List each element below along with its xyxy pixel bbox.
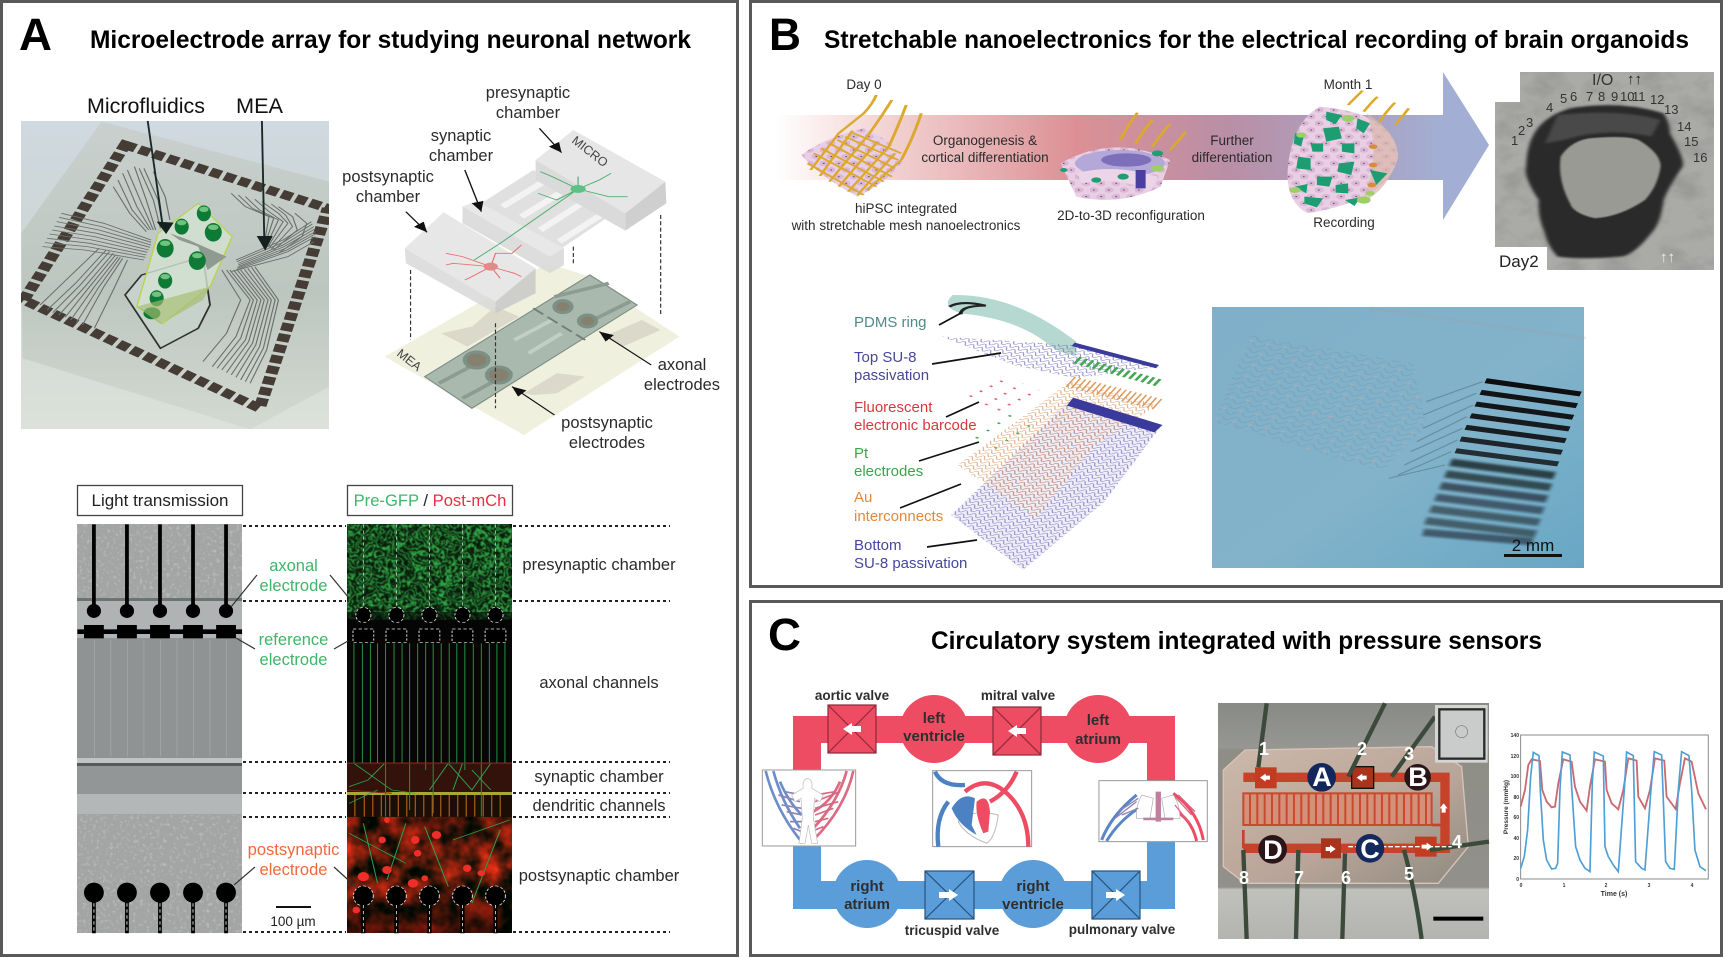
valve: tricuspid xyxy=(925,871,974,919)
label: pulmonary valve: pulmonary valve xyxy=(1069,922,1176,937)
label: MICRO: MICRO xyxy=(569,133,611,170)
label: postsynaptic chamber (right): postsynaptic chamber xyxy=(519,867,680,885)
panel A: microelectrode array xyxy=(2,2,738,956)
photo: organoid on electrodes, day 2: 1 xyxy=(1511,133,1518,148)
label box: Pre-GFP / Post-mCh: Pre-GFP / Post-mCh xyxy=(354,491,506,510)
label: postsynaptic chamber: postsynaptic xyxy=(342,168,434,186)
label: reference electrode: reference xyxy=(259,631,328,649)
label: synaptic chamber: synaptic xyxy=(431,127,491,145)
panel letter A: A xyxy=(19,9,52,60)
label: presynaptic chamber: chamber xyxy=(496,104,561,122)
photo: circulatory chip: 8 xyxy=(1239,868,1249,888)
label: Recording: Recording xyxy=(1313,215,1375,230)
label: mitral valve: mitral valve xyxy=(981,688,1056,703)
label: MEA on base: MEA xyxy=(394,346,425,374)
label: reference electrode: electrode xyxy=(260,651,327,669)
label: further differentiation: Further xyxy=(1210,133,1254,148)
arrow: MEA pointer xyxy=(257,121,273,251)
label: 2D-to-3D reconfiguration: 2D-to-3D reconfiguration xyxy=(1057,208,1205,223)
label: hiPSC integrated: with stretchable mesh nanoelectronics xyxy=(791,218,1021,233)
diagram: exploded mesh layers xyxy=(942,295,1162,570)
label: Microfluidics: Microfluidics xyxy=(87,95,205,118)
photo: MEA chip with microfluidics xyxy=(21,121,329,429)
label: axonal electrodes: axonal xyxy=(658,356,706,374)
label: bottom SU-8 passivation: SU-8 passivation xyxy=(854,555,967,572)
photo: organoid on electrodes, day 2: I/O xyxy=(1592,72,1613,89)
label: right atrium: atrium xyxy=(844,896,890,913)
photo: circulatory chip: 5 xyxy=(1404,864,1414,884)
label: dendritic channels: dendritic channels xyxy=(532,797,666,815)
label box: Pre-GFP / Post-mCh xyxy=(348,486,512,516)
schematic pointer arrows xyxy=(406,128,651,415)
micrograph: light transmission xyxy=(77,524,242,933)
photo: circulatory chip: 3 xyxy=(1404,744,1414,764)
inset: body vasculature xyxy=(762,770,856,846)
leader lines for layer labels xyxy=(900,313,1001,547)
label: further differentiation: differentiation xyxy=(1192,150,1272,165)
label: right atrium: right xyxy=(850,878,884,895)
label: axonal channels: axonal channels xyxy=(539,674,659,692)
process arrow xyxy=(776,72,1489,220)
label: right ventricle: ventricle xyxy=(1002,896,1064,913)
label: axonal electrodes: electrodes xyxy=(644,376,720,394)
chart: pressure over time: 0 xyxy=(1516,877,1519,883)
valve: aortic xyxy=(828,705,876,753)
photo: circulatory chip: B xyxy=(1408,762,1428,792)
chart: pressure over time: 120 xyxy=(1511,754,1519,760)
label box: light transmission: Light transmission xyxy=(91,491,229,510)
label: fluorescent electronic barcode: electronic barcode xyxy=(854,417,977,434)
arrow: microfluidics pointer xyxy=(148,121,174,234)
chart: pressure over time: 2 xyxy=(1605,883,1608,889)
label: left atrium: left xyxy=(1087,712,1109,729)
photo: organoid on electrodes, day 2: 11 xyxy=(1632,89,1646,104)
photo: circulatory chip: 6 xyxy=(1341,868,1351,888)
label: right ventricle: right xyxy=(1016,878,1050,895)
panel letter B: B xyxy=(769,9,801,60)
heading: stretchable nanoelectronics: Stretchable nanoelectronics for the electrical recording of brain organoids xyxy=(824,26,1689,54)
photo: circulatory chip: 4 xyxy=(1452,832,1462,852)
photo: organoid on electrodes, day 2: 3 xyxy=(1526,115,1533,130)
label: aortic valve: aortic valve xyxy=(815,688,890,703)
label: Pt electrodes: Pt xyxy=(854,445,868,462)
photo: circulatory chip: D xyxy=(1263,835,1283,865)
label: postsynaptic electrode: postsynaptic xyxy=(248,841,339,859)
panel letter C: C xyxy=(768,609,801,660)
label: left ventricle: ventricle xyxy=(903,728,965,745)
red arterial loop xyxy=(793,695,1175,781)
inset: lungs xyxy=(1099,781,1207,842)
scale bar: 100 µm xyxy=(270,906,316,929)
label: top SU-8 passivation: passivation xyxy=(854,367,929,384)
label: left ventricle: left xyxy=(923,710,945,727)
photo: organoid on electrodes, day 2: 7 xyxy=(1586,89,1593,104)
label: left atrium: atrium xyxy=(1075,731,1121,748)
label: postsynaptic chamber: chamber xyxy=(356,188,421,206)
photo: stretchable mesh device xyxy=(1212,307,1584,568)
heading: microelectrode array: Microelectrode array for studying neuronal network xyxy=(90,26,691,54)
organoid: 2D-to-3D reconfiguration xyxy=(1060,113,1186,200)
photo: organoid on electrodes, day 2: ↑↑ xyxy=(1627,71,1642,88)
chart: pressure over time: 3 xyxy=(1648,883,1651,889)
photo: circulatory chip: A xyxy=(1312,762,1332,792)
photo: organoid on electrodes, day 2: ↑↑ xyxy=(1660,249,1675,266)
chart: pressure over time: 40 xyxy=(1513,836,1519,842)
diagram: exploded chamber schematic xyxy=(385,130,680,435)
label: synaptic chamber: chamber xyxy=(429,147,494,165)
photo: organoid on electrodes, day 2: Day2 xyxy=(1499,252,1539,271)
photo: organoid on electrodes, day 2: 14 xyxy=(1677,119,1691,134)
photo: circulatory chip xyxy=(1218,703,1489,939)
chart: pressure over time: 100 xyxy=(1511,774,1519,780)
chart: pressure over time: 140 xyxy=(1511,733,1519,739)
scale bar: 100 µm: 100 µm xyxy=(270,914,316,929)
chart: pressure over time: Time (s) xyxy=(1601,891,1627,898)
photo: organoid on electrodes, day 2: 6 xyxy=(1570,89,1577,104)
photo: organoid on electrodes, day 2: 13 xyxy=(1664,102,1678,117)
chart: pressure over time: 1 xyxy=(1563,883,1566,889)
blue venous loop xyxy=(793,842,1175,928)
label: axonal electrode: axonal xyxy=(269,557,318,575)
photo: organoid on electrodes, day 2: 12 xyxy=(1650,92,1664,107)
photo: organoid on electrodes, day 2: 2 xyxy=(1518,123,1525,138)
label: organogenesis: Organogenesis & xyxy=(933,133,1037,148)
label: postsynaptic electrodes: electrodes xyxy=(569,434,645,452)
label: fluorescent electronic barcode: Fluorescent xyxy=(854,399,932,416)
photo: organoid on electrodes, day 2: 8 xyxy=(1598,89,1605,104)
chart: pressure over time: Pressure (mmHg) xyxy=(1503,780,1510,834)
photo: organoid on electrodes, day 2: 10 xyxy=(1620,89,1634,104)
label: Day 0: Day 0 xyxy=(846,77,882,92)
label: bottom SU-8 passivation: Bottom xyxy=(854,537,902,554)
heading: circulatory system: Circulatory system integrated with pressure sensors xyxy=(931,627,1542,655)
loop: pulmonary and systemic flow diagram xyxy=(762,688,1207,938)
photo: circulatory chip: C xyxy=(1360,834,1380,864)
organoid: day 0 mesh xyxy=(801,95,921,197)
label: postsynaptic electrodes: postsynaptic xyxy=(561,414,653,432)
label: postsynaptic electrode: electrode xyxy=(260,861,327,879)
photo: organoid on electrodes, day 2: 9 xyxy=(1611,89,1618,104)
chart: pressure over time: 4 xyxy=(1691,883,1694,889)
label: PDMS ring: PDMS ring xyxy=(854,314,927,331)
label: presynaptic chamber (right): presynaptic chamber xyxy=(522,556,676,574)
micrograph: fluorescence Pre-GFP / Post-mCh xyxy=(347,524,512,933)
photo: organoid on electrodes, day 2: 15 xyxy=(1684,134,1698,149)
chart: pressure over time: 20 xyxy=(1513,856,1519,862)
inset: heart xyxy=(933,771,1032,847)
organoid: month 1 recording xyxy=(1288,91,1409,213)
valve: mitral xyxy=(993,707,1041,755)
chart: pressure over time: 80 xyxy=(1513,795,1519,801)
label: axonal electrode: electrode xyxy=(260,577,327,595)
label: Month 1: Month 1 xyxy=(1324,77,1372,92)
chart: pressure over time: 60 xyxy=(1513,815,1519,821)
photo: circulatory chip: 1 xyxy=(1259,739,1269,759)
photo: stretchable mesh device: 2 mm xyxy=(1512,536,1554,555)
photo: circulatory chip: 7 xyxy=(1294,868,1304,888)
label: Pt electrodes: electrodes xyxy=(854,463,923,480)
label: tricuspid valve: tricuspid valve xyxy=(905,923,1000,938)
photo: organoid on electrodes, day 2: 16 xyxy=(1693,150,1707,165)
label: presynaptic chamber: presynaptic xyxy=(486,84,570,102)
label: organogenesis: cortical differentiation xyxy=(921,150,1049,165)
photo: organoid on electrodes, day 2: 5 xyxy=(1560,91,1567,106)
panel C: circulatory system xyxy=(750,602,1722,956)
chart: pressure over time xyxy=(1503,733,1708,898)
panel B: stretchable nanoelectronics xyxy=(750,2,1722,586)
label: synaptic chamber (right): synaptic chamber xyxy=(534,768,664,786)
label: top SU-8 passivation: Top SU-8 xyxy=(854,349,917,366)
chart: pressure over time: 0 xyxy=(1520,883,1523,889)
photo: organoid on electrodes, day 2: 4 xyxy=(1546,100,1553,115)
photo: organoid on electrodes, day 2 xyxy=(1495,71,1714,271)
photo: circulatory chip: 2 xyxy=(1357,739,1367,759)
label: Au interconnects: interconnects xyxy=(854,508,943,525)
label: hiPSC integrated: hiPSC integrated xyxy=(855,201,957,216)
label: MEA: MEA xyxy=(236,95,283,118)
label box: light transmission xyxy=(78,486,242,516)
label: Au interconnects: Au xyxy=(854,489,872,506)
valve: pulmonary xyxy=(1092,871,1140,919)
